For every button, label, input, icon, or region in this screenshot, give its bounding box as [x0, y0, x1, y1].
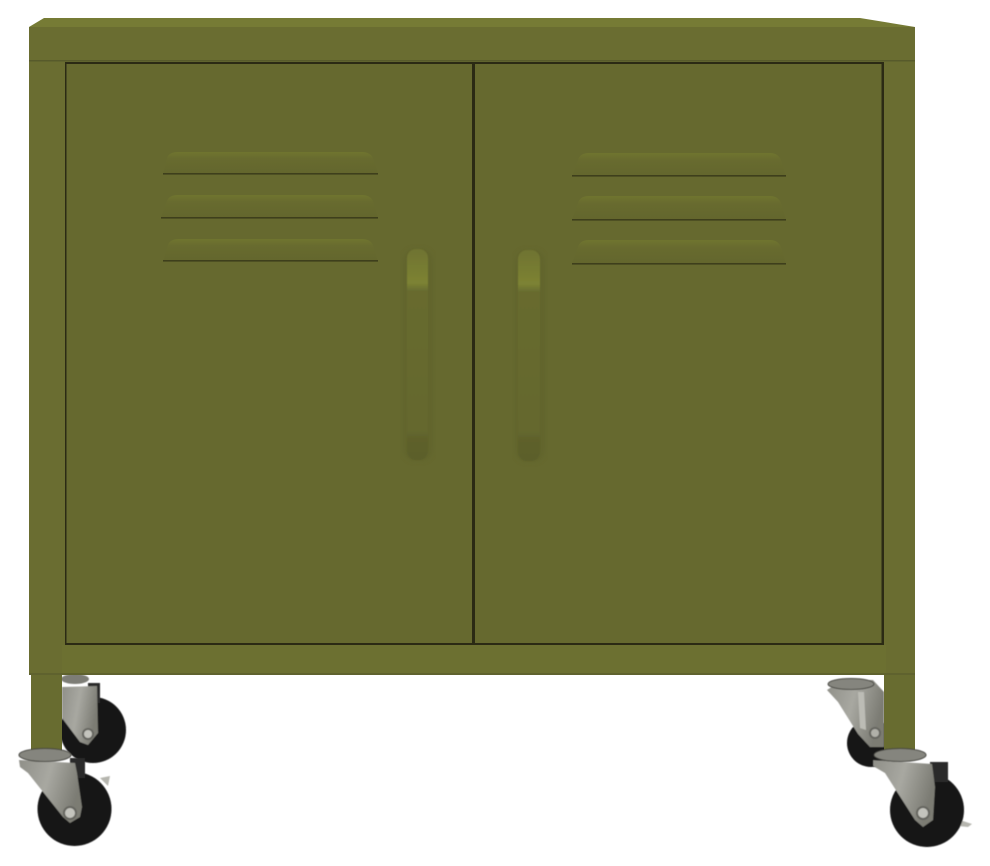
- cabinet body: [29, 18, 915, 751]
- frame front: [29, 27, 915, 675]
- back right caster: [827, 678, 895, 767]
- right door louvers: [572, 153, 786, 265]
- front right caster: [873, 748, 972, 847]
- right door handle: [515, 250, 545, 462]
- front left caster: [19, 748, 112, 846]
- right door: [475, 64, 882, 643]
- back left caster: [60, 674, 126, 763]
- left door: [66, 64, 472, 643]
- top panel: [29, 18, 915, 27]
- left door louvers: [161, 152, 378, 262]
- door recess: [65, 62, 884, 645]
- right leg: [884, 675, 915, 751]
- left leg: [31, 675, 62, 751]
- left door handle: [403, 249, 433, 461]
